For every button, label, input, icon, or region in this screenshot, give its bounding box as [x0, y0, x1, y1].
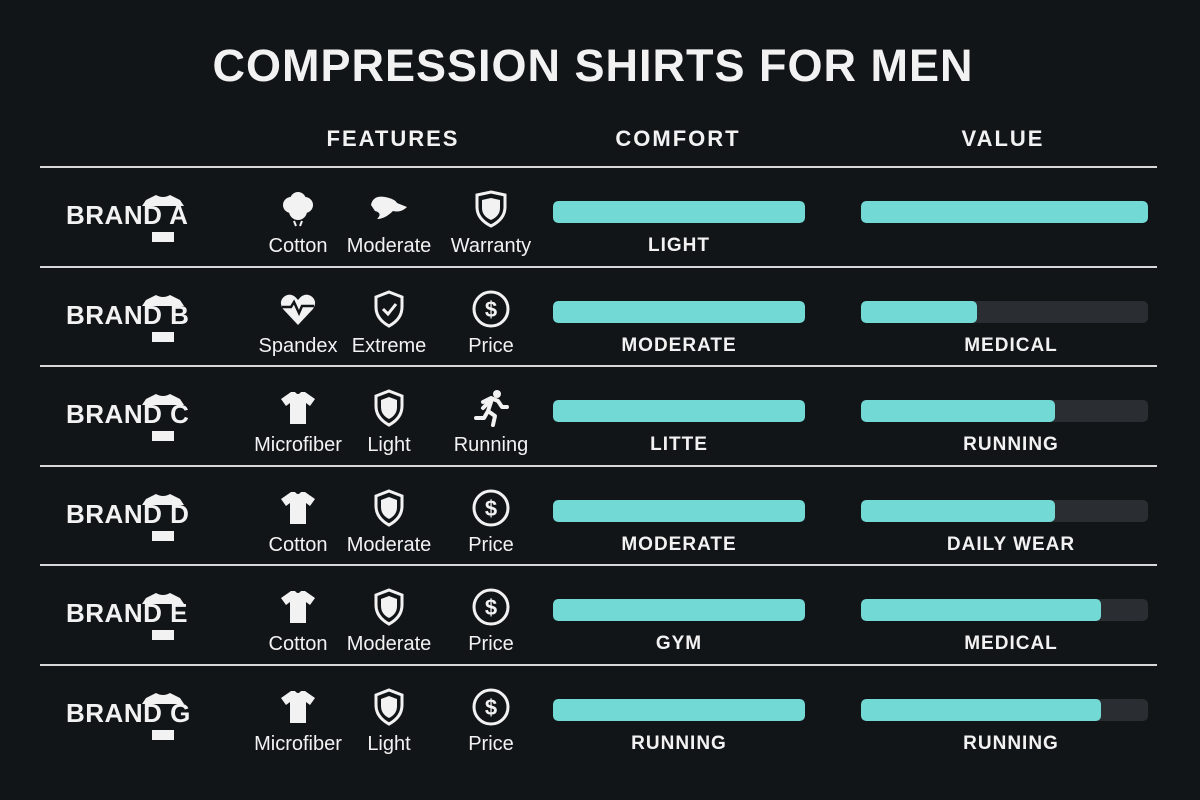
- comfort bar: [553, 500, 805, 522]
- header: comfort: COMFORT: [615, 126, 741, 151]
- comfort label: MODERATE: [621, 335, 737, 356]
- feature: microfiber: [254, 392, 342, 456]
- comfort label: RUNNING: [631, 733, 727, 754]
- comfort label: MODERATE: [621, 534, 737, 555]
- brand label A: [66, 195, 188, 242]
- feature: price: [468, 290, 514, 357]
- value bar: [861, 699, 1148, 721]
- feature: moderate: Moderate: [347, 633, 431, 655]
- row: brand D: [66, 489, 1148, 556]
- feature: extreme: [352, 290, 426, 357]
- feature: price: $: [485, 595, 497, 620]
- value bar: [861, 301, 1148, 323]
- feature: spandex: [259, 294, 338, 357]
- comfort bar: [553, 301, 805, 323]
- value bar: [861, 500, 1148, 522]
- brand label E: BRAND E: [66, 598, 188, 628]
- value label: MEDICAL: [964, 633, 1058, 654]
- brand label C: BRAND C: [66, 399, 189, 429]
- brand label A: BRAND A: [66, 200, 188, 230]
- row: brand E: [66, 588, 1148, 655]
- brand label G: [66, 693, 191, 740]
- feature: microfiber: Microfiber: [254, 733, 342, 755]
- feature: price: Price: [468, 534, 514, 556]
- comfort bar: [553, 201, 805, 223]
- feature: price: [468, 490, 514, 556]
- value label: RUNNING: [963, 434, 1059, 455]
- comfort label: LIGHT: [648, 235, 710, 256]
- feature: moderate: [347, 196, 431, 257]
- feature: microfiber: [254, 691, 342, 755]
- feature: price: Price: [468, 335, 514, 357]
- feature: cotton: [269, 591, 327, 655]
- feature: cotton: Cotton: [269, 534, 327, 556]
- feature: running: Running: [454, 434, 528, 456]
- value label: MEDICAL: [964, 335, 1058, 356]
- feature: light: [367, 688, 411, 755]
- row: brand G: [66, 688, 1148, 755]
- feature: moderate: Moderate: [347, 534, 431, 556]
- feature: cotton: [269, 192, 327, 257]
- row: brand C: [66, 389, 1148, 456]
- brand label D: [66, 494, 189, 541]
- brand label E: [66, 593, 188, 640]
- feature: price: $: [485, 297, 497, 322]
- header: value: VALUE: [962, 126, 1044, 151]
- feature: moderate: Moderate: [347, 235, 431, 257]
- feature: price: $: [485, 496, 497, 521]
- value label: DAILY WEAR: [947, 534, 1075, 555]
- row: brand B: [66, 290, 1148, 357]
- feature: price: [468, 588, 514, 655]
- feature: moderate: [347, 489, 431, 556]
- feature: spandex: Spandex: [259, 335, 337, 357]
- feature: price: [468, 688, 514, 755]
- brand label G: BRAND G: [66, 698, 191, 728]
- feature: light: Light: [367, 434, 411, 456]
- value bar: [861, 400, 1148, 422]
- feature: warranty: [450, 190, 532, 257]
- feature: extreme: Extreme: [352, 335, 426, 357]
- value bar: [861, 599, 1148, 621]
- feature: price: Price: [468, 733, 514, 755]
- title: COMPRESSION SHIRTS FOR MEN: [212, 40, 974, 91]
- feature: price: $: [485, 695, 497, 720]
- feature: moderate: [347, 588, 431, 655]
- feature: cotton: [269, 492, 327, 556]
- row: brand A: [66, 190, 1148, 257]
- brand label D: BRAND D: [66, 499, 189, 529]
- feature: price: Price: [468, 633, 514, 655]
- brand label B: BRAND B: [66, 300, 189, 330]
- comfort label: GYM: [656, 633, 702, 654]
- feature: cotton: Cotton: [269, 633, 327, 655]
- feature: cotton: Cotton: [269, 235, 327, 257]
- feature: light: Light: [367, 733, 411, 755]
- value label: RUNNING: [963, 733, 1059, 754]
- header: features: FEATURES: [327, 126, 459, 151]
- feature: microfiber: Microfiber: [254, 434, 342, 456]
- brand label C: [66, 394, 189, 441]
- feature: warranty: Warranty: [451, 235, 531, 257]
- comfort bar: [553, 400, 805, 422]
- brand label B: [66, 295, 189, 342]
- feature: running: [454, 390, 528, 456]
- comfort bar: [553, 699, 805, 721]
- comfort label: LITTE: [650, 434, 708, 455]
- feature: light: [367, 389, 411, 456]
- comfort bar: [553, 599, 805, 621]
- value bar: [861, 201, 1148, 223]
